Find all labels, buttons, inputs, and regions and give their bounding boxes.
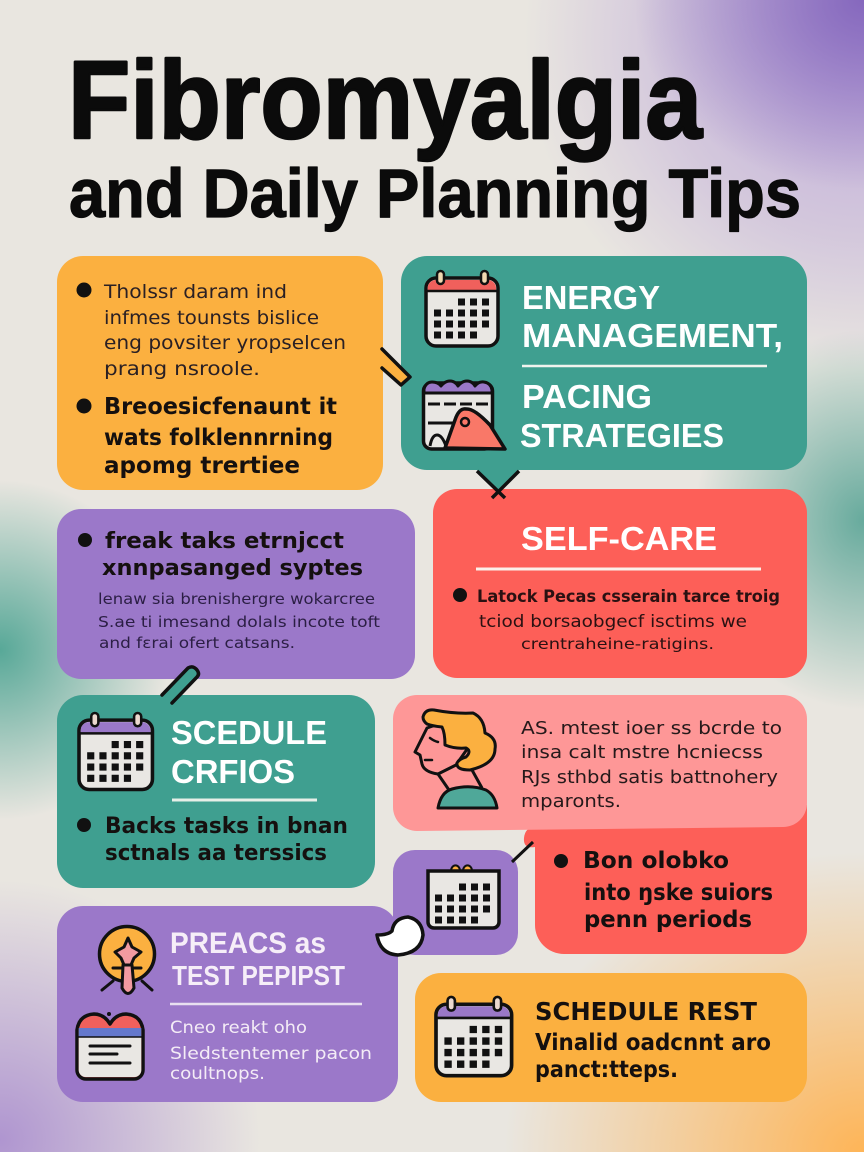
icon: person profile — [415, 710, 497, 808]
panel: purple symptoms — [57, 509, 415, 679]
bold red text — [583, 848, 773, 933]
heading: energy management — [522, 279, 783, 354]
connector: orange to teal — [382, 349, 410, 385]
bullet text: teal tasks — [77, 813, 348, 866]
panel: small purple calendar — [393, 850, 518, 955]
bold red text: Bon olobko — [583, 848, 729, 874]
heading: schedule: SCEDULE — [171, 714, 327, 751]
panel: orange tips — [57, 256, 383, 490]
heading: self-care: SELF-CARE — [521, 520, 717, 557]
icon: calendar purple — [79, 713, 152, 789]
bullet text: self-care: tciod borsaobgecf isctims we — [479, 612, 747, 632]
connector: cross between teal and red — [477, 470, 519, 498]
panel: schedule rest — [415, 973, 807, 1102]
bullet text: bold orange tip: wats folklennrning — [104, 425, 333, 451]
panel: pink person — [393, 695, 807, 831]
purple panel text: Sledstentemer pacon — [170, 1044, 372, 1064]
pink text: insa calt mstre hcniecss — [521, 742, 763, 763]
heading: preacs: TEST PEPIPST — [172, 960, 345, 991]
icon: calendar on purple — [428, 865, 499, 928]
bullet text: self-care: Latock Pecas csserain tarce troig — [477, 587, 780, 606]
heading: preacs — [170, 927, 345, 991]
panel: red periods — [524, 805, 807, 954]
schedule rest text: SCHEDULE REST — [535, 997, 757, 1026]
heading: pacing strategies: PACING — [522, 378, 652, 415]
bullet text: regular tips: infmes tounsts bislice — [104, 307, 319, 329]
bold red text: into ŋske suiors — [584, 880, 773, 906]
bullet text: bold orange tip: apomg trertiee — [104, 453, 300, 479]
heading: energy management: MANAGEMENT, — [522, 317, 783, 354]
bold red text: penn periods — [584, 907, 752, 933]
purple panel text — [170, 1018, 372, 1084]
connector: teal to purple — [162, 667, 198, 703]
panel: schedule teal — [57, 695, 375, 888]
small purple text — [98, 590, 380, 652]
heading: preacs: PREACS as — [170, 927, 326, 960]
panel: energy management and pacing — [401, 256, 807, 470]
bullet text: bold orange tip: Breoesicfenaunt it — [104, 394, 337, 420]
schedule rest text: Vinalid oadcnnt aro — [535, 1028, 771, 1056]
pink text: AS. mtest ioer ss bcrde to — [521, 718, 782, 739]
heading: schedule — [171, 714, 327, 790]
panel: self-care — [433, 489, 807, 678]
heading: pacing strategies: STRATEGIES — [520, 417, 724, 454]
small purple text: and fɛrai ofert catsans. — [99, 634, 295, 652]
title: Fibromyalgia — [68, 39, 703, 162]
icon: heart calendar — [77, 1012, 143, 1079]
connector: purple to red — [512, 842, 533, 862]
pink text: RJs sthbd satis battnohery — [521, 767, 778, 788]
bullet text: self-care: crentraheine-ratigins. — [521, 635, 714, 653]
bullet text: regular tips: Tholssr daram ind — [103, 281, 287, 303]
icon: star medal — [100, 926, 154, 994]
bullet text: teal tasks: sctnals aa terssics — [105, 840, 327, 866]
icon: calendar with bird — [424, 381, 505, 449]
pink text — [521, 718, 782, 812]
bullet text: regular tips: eng povsiter yropselcen — [104, 332, 346, 354]
purple panel text: Cneo reakt oho — [170, 1018, 307, 1038]
bold purple text: xnnpasanged syptes — [102, 555, 363, 581]
heading: schedule: CRFIOS — [171, 753, 295, 790]
purple panel text: coultnops. — [170, 1064, 265, 1084]
small purple text: lenaw sia brenishergre wokarcree — [98, 590, 375, 608]
bullet text: regular tips: prang nsroole. — [104, 358, 260, 380]
title — [68, 39, 801, 232]
icon: white speech blob — [377, 917, 423, 955]
heading: energy management: ENERGY — [522, 279, 660, 316]
icon: calendar on orange — [436, 997, 512, 1076]
bullet text: bold orange tip — [76, 394, 337, 479]
bold purple text — [102, 528, 363, 581]
icon: calendar red — [426, 271, 498, 346]
bullet text: regular tips — [76, 281, 346, 380]
schedule rest text — [535, 997, 771, 1083]
bullet text: self-care — [453, 587, 780, 653]
pink text: mparonts. — [521, 791, 621, 812]
panel: purple pacing tips — [57, 906, 398, 1102]
schedule rest text: panct:tteps. — [535, 1055, 678, 1083]
small purple text: S.ae ti imesand dolals incote toft — [98, 613, 380, 631]
bullet text: teal tasks: Backs tasks in bnan — [105, 813, 348, 839]
heading: pacing strategies — [520, 378, 724, 454]
bold purple text: freak taks etrnjcct — [105, 528, 344, 554]
title: and Daily Planning Tips — [69, 155, 801, 232]
